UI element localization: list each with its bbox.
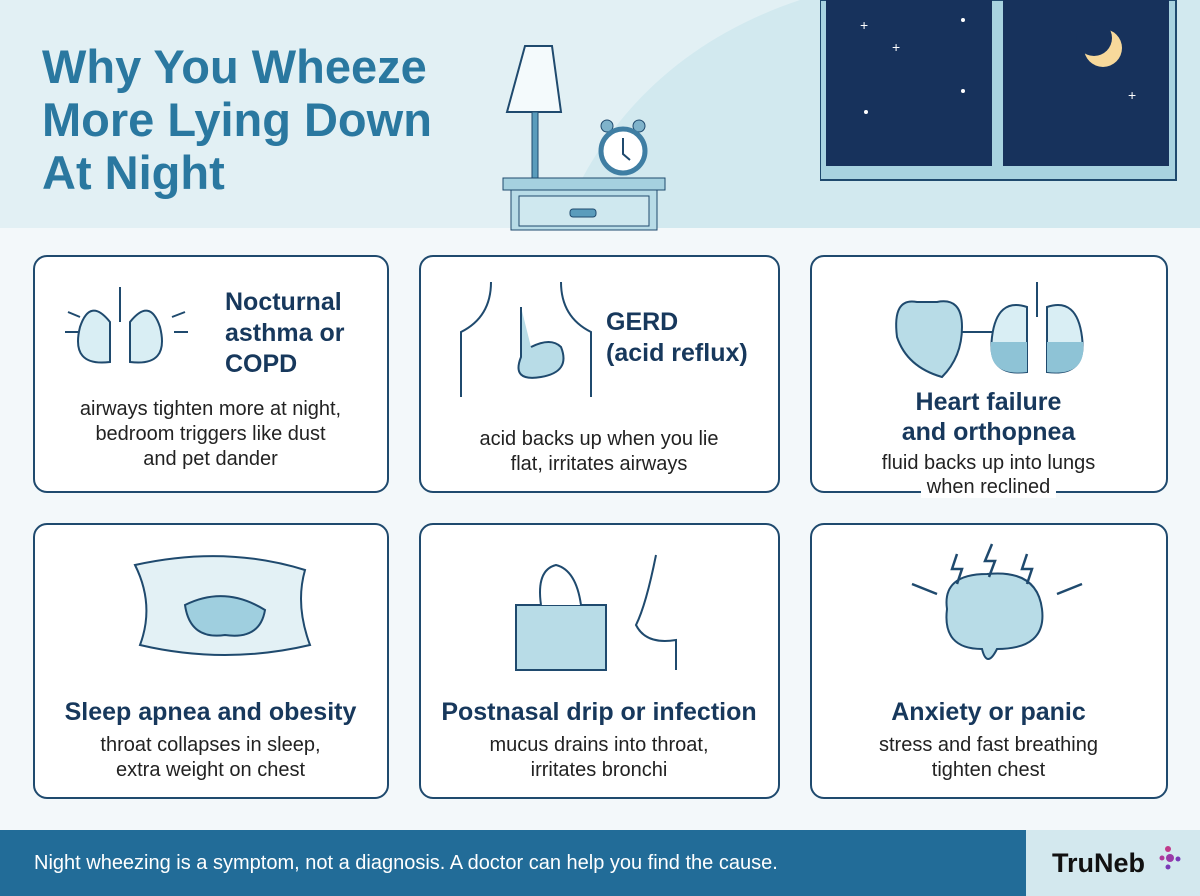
window with night sky: + — [892, 39, 900, 55]
card: sleep apnea: throat collapses in sleep, — [100, 734, 321, 756]
card: GERD: GERD — [606, 308, 678, 336]
card: heart failure: fluid backs up into lungs — [882, 452, 1095, 474]
card: sleep apnea: Sleep apnea and obesity — [65, 698, 356, 726]
card: nocturnal asthma: COPD — [225, 350, 297, 378]
header background — [0, 0, 1200, 228]
logo: TruNeb: TruNeb — [1052, 848, 1145, 878]
logo: TruNeb — [1026, 830, 1200, 896]
card: heart failure: when reclined — [927, 476, 1050, 498]
card: nocturnal asthma — [33, 255, 389, 493]
card: postnasal drip: irritates bronchi — [531, 759, 667, 781]
footer banner — [0, 830, 1026, 896]
card: heart failure: and orthopnea — [902, 418, 1075, 446]
card: postnasal drip: Postnasal drip or infection — [441, 698, 757, 726]
title: At Night — [42, 146, 225, 199]
card: postnasal drip: mucus drains into throat, — [490, 734, 708, 756]
card: anxiety: Anxiety or panic — [891, 698, 1086, 726]
card: nocturnal asthma: airways tighten more at night, — [80, 398, 341, 420]
card: heart failure: Heart failure — [916, 388, 1061, 416]
card: nocturnal asthma: and pet dander — [143, 448, 278, 470]
card: sleep apnea — [33, 523, 389, 799]
title — [42, 40, 432, 199]
card: GERD: acid backs up when you lie — [479, 428, 719, 450]
card: anxiety — [810, 523, 1168, 799]
window with night sky: + — [1128, 87, 1136, 103]
window with night sky — [820, 0, 1177, 181]
footer banner: Night wheezing is a symptom, not a diagnosis. A doctor can help you find the cause. — [34, 852, 778, 874]
title: Why You Wheeze — [42, 40, 427, 93]
window with night sky: + — [860, 17, 868, 33]
card: GERD: flat, irritates airways — [511, 453, 687, 475]
card: anxiety: stress and fast breathing — [879, 734, 1098, 756]
card: anxiety: tighten chest — [932, 759, 1045, 781]
card: postnasal drip — [419, 523, 780, 799]
card: nocturnal asthma: asthma or — [225, 319, 344, 347]
card: GERD: (acid reflux) — [606, 339, 748, 367]
card: sleep apnea: extra weight on chest — [116, 759, 305, 781]
illustration: lamp, clock, nightstand — [502, 45, 666, 230]
card: nocturnal asthma: bedroom triggers like dust — [95, 423, 326, 445]
card: GERD — [419, 255, 780, 493]
card: heart failure — [810, 255, 1168, 493]
title: More Lying Down — [42, 93, 432, 146]
card: nocturnal asthma: Nocturnal — [225, 288, 342, 316]
